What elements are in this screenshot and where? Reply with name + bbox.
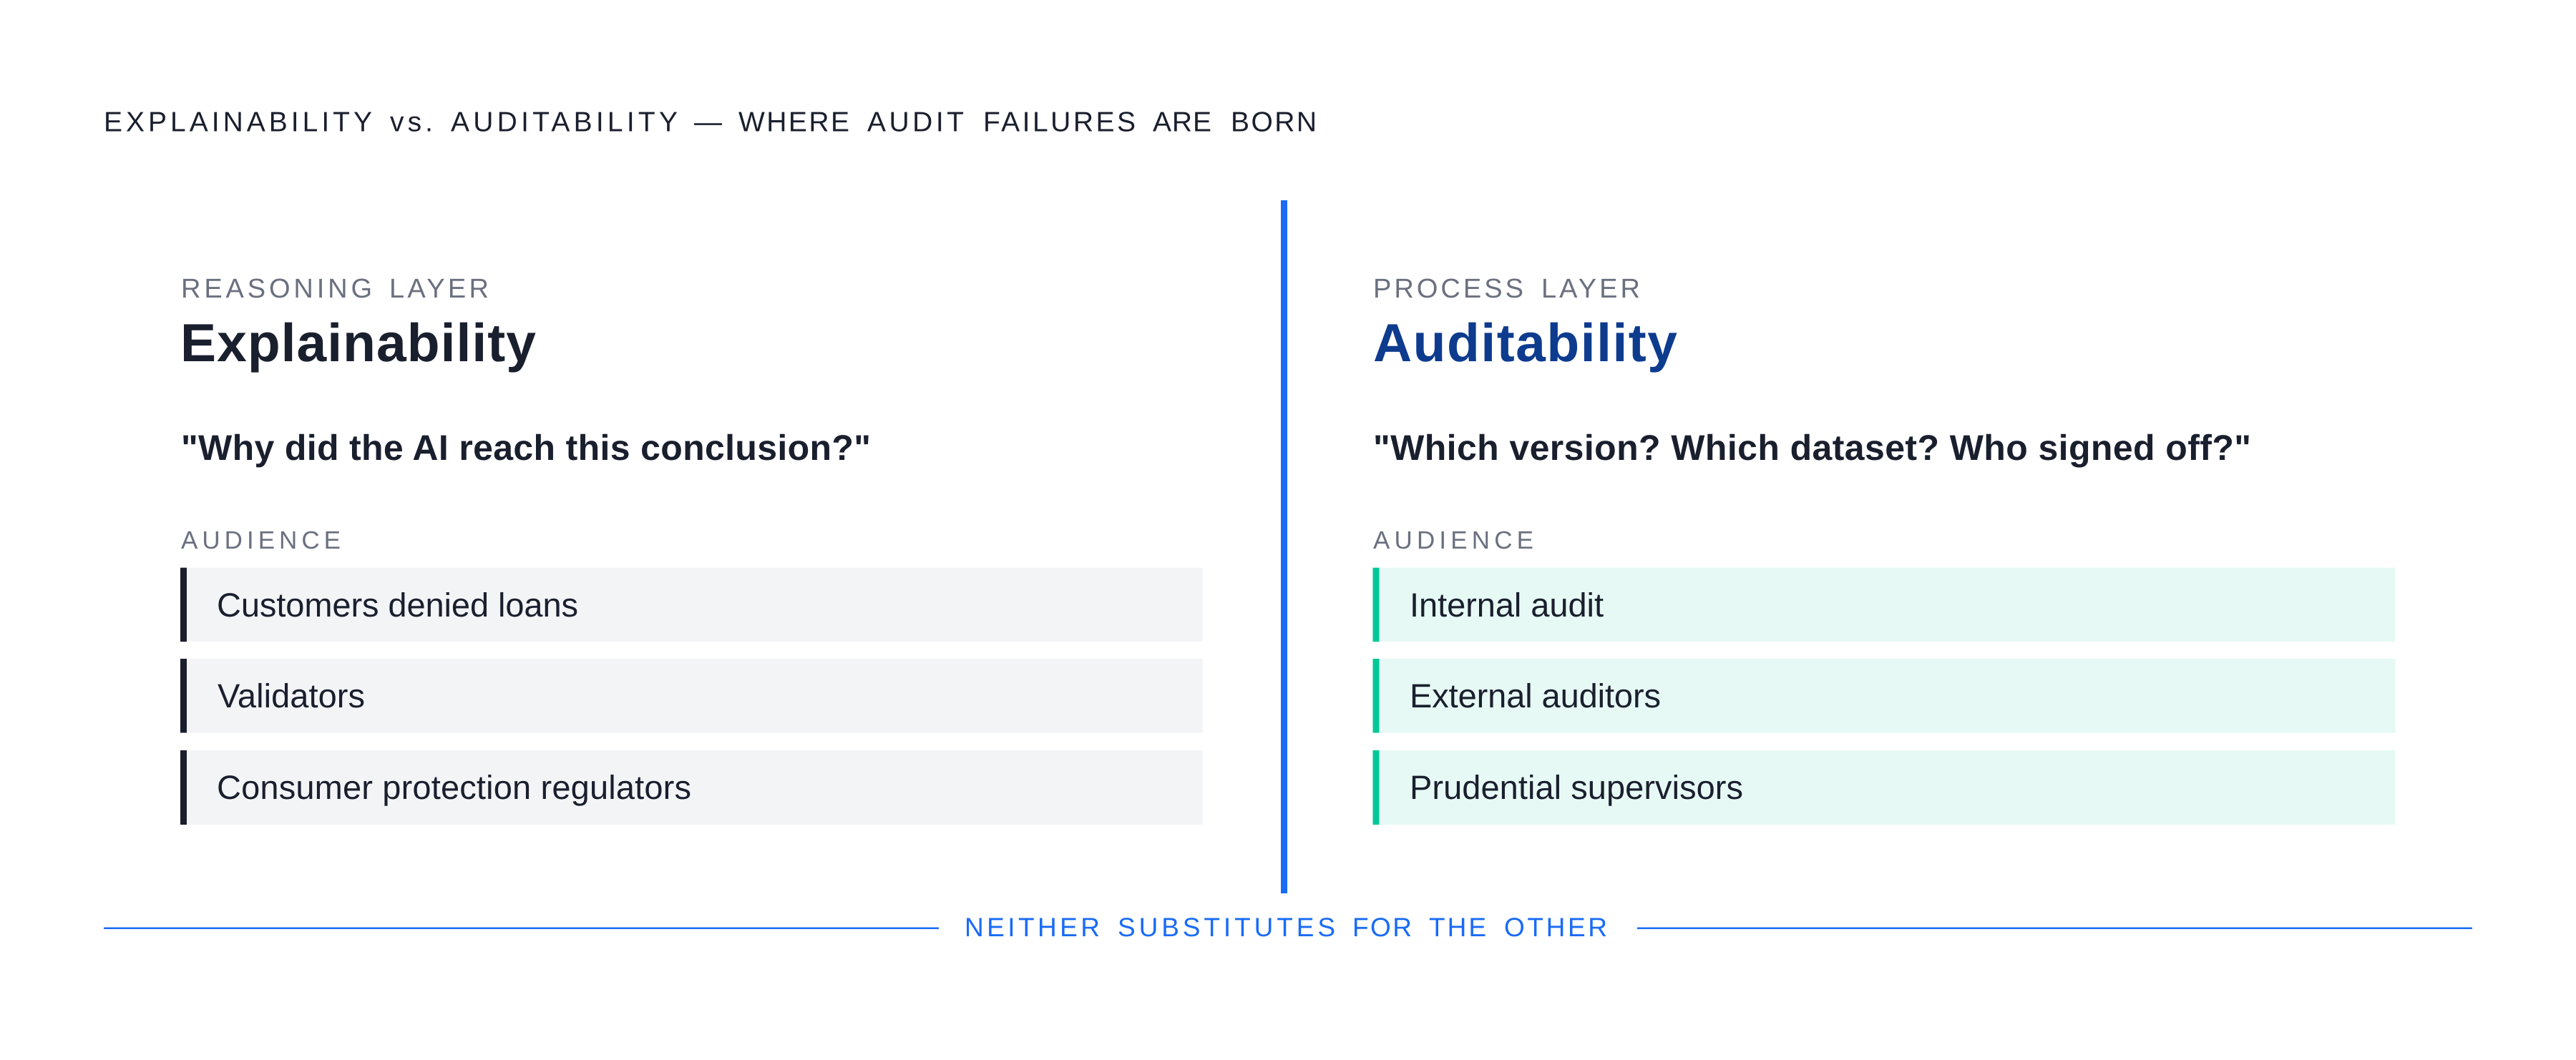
audience item: validators [180, 659, 1203, 732]
eyebrow: reasoning layer: REASONING [181, 274, 372, 304]
panel: auditability [1372, 274, 2396, 825]
title: AUDIT [867, 107, 964, 137]
title: EXPLAINABILITY [104, 107, 372, 137]
panel: explainability [180, 274, 1203, 825]
question: auditability: "Which version? Which dataset? Who signed off?" [1373, 428, 2251, 468]
audience item: prudential supervisors: Prudential supervisors [1410, 768, 1743, 806]
title: AUDITABILITY [451, 107, 678, 137]
eyebrow: reasoning layer [181, 274, 489, 304]
eyebrow: reasoning layer: LAYER [389, 274, 489, 304]
heading: auditability: Auditability [1373, 313, 1677, 373]
audience item: internal audit: Internal audit [1410, 586, 1604, 624]
audience item: internal audit [1372, 568, 2396, 642]
audience label: auditability: AUDIENCE [1373, 526, 1533, 554]
footer: neither substitutes for the other: NEITHER [965, 913, 1100, 942]
title: vs. [390, 107, 433, 137]
title: WHERE [738, 107, 849, 137]
title [104, 107, 1317, 137]
center divider [1281, 200, 1287, 893]
audience item: external auditors [1372, 659, 2396, 732]
audience item: external auditors: External auditors [1410, 677, 1661, 715]
footer: neither substitutes for the other: SUBSTITUTES [1118, 913, 1335, 942]
title: BORN [1231, 107, 1317, 137]
heading: explainability: Explainability [180, 313, 536, 373]
footer: neither substitutes for the other: OTHER [1504, 913, 1607, 942]
eyebrow: process layer: LAYER [1541, 274, 1640, 304]
title: ARE [1153, 107, 1211, 137]
title: FAILURES [983, 107, 1136, 137]
footer: neither substitutes for the other [104, 913, 2472, 942]
footer: neither substitutes for the other: FOR [1352, 913, 1412, 942]
audience item: customers denied loans: Customers denied loans [217, 586, 578, 624]
eyebrow: process layer [1373, 274, 1640, 304]
audience item: customers denied loans [180, 568, 1203, 642]
audience label: explainability: AUDIENCE [181, 526, 341, 554]
audience item: consumer protection regulators [180, 750, 1203, 825]
audience item: validators: Validators [218, 677, 365, 715]
audience item: prudential supervisors [1372, 750, 2396, 825]
question: explainability: "Why did the AI reach this conclusion?" [181, 428, 871, 468]
audience item: consumer protection regulators: Consumer protection regulators [217, 768, 691, 806]
eyebrow: process layer: PROCESS [1373, 274, 1523, 304]
footer: neither substitutes for the other: THE [1429, 913, 1486, 942]
title: — [694, 107, 722, 137]
